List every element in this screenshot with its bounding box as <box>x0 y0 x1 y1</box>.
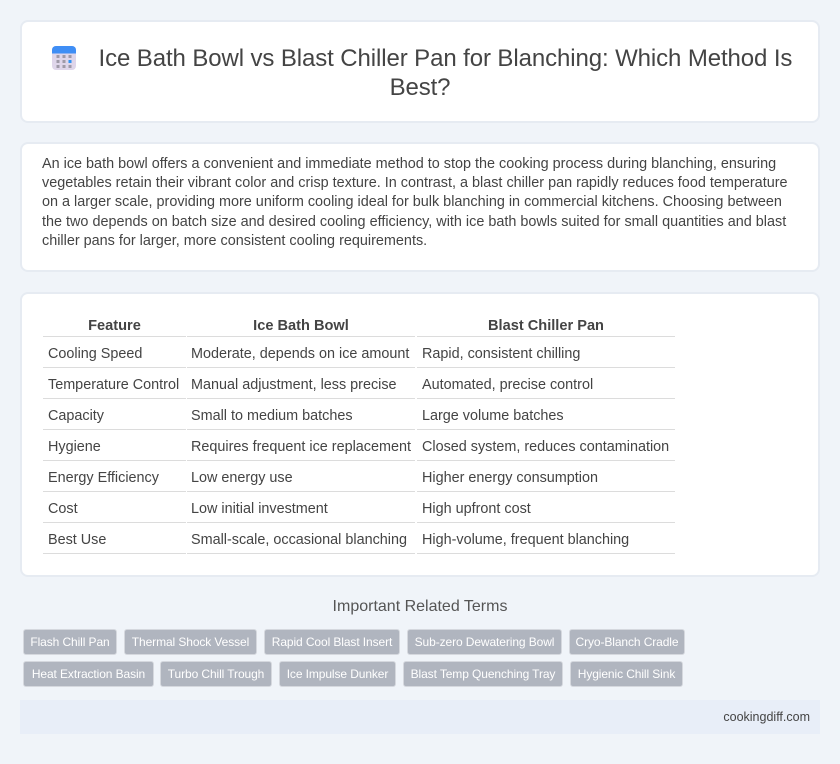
table header row: Feature <box>88 318 141 334</box>
icon: calendar grid <box>52 46 76 70</box>
tag <box>124 629 257 655</box>
row: temperature control <box>43 377 675 399</box>
row: cost: High upfront cost <box>422 501 531 517</box>
tag <box>569 629 685 655</box>
row: temperature control: Automated, precise control <box>422 377 593 393</box>
row: cooling speed <box>43 346 675 368</box>
tag <box>570 661 683 687</box>
footer source label: cookingdiff.com <box>723 710 810 724</box>
row: best use: Best Use <box>48 532 106 548</box>
tag: Sub-zero Dewatering Bowl <box>415 635 554 649</box>
row: hygiene: Closed system, reduces contamination <box>422 439 669 455</box>
row: energy efficiency: Low energy use <box>191 470 293 486</box>
intro paragraph: chiller pans for larger, more consistent cooling requirements. <box>42 233 427 249</box>
row: hygiene: Requires frequent ice replacement <box>191 439 411 455</box>
tag: Blast Temp Quenching Tray <box>411 667 555 681</box>
tag: Cryo-Blanch Cradle <box>576 635 678 649</box>
row: capacity <box>43 408 675 430</box>
title: Ice Bath Bowl vs Blast Chiller Pan for Blanching: Which Method Is <box>98 45 792 72</box>
table header row <box>43 318 675 337</box>
row: cost: Cost <box>48 501 78 517</box>
intro paragraph <box>42 156 788 249</box>
panel: intro text card <box>20 142 820 272</box>
row: hygiene: Hygiene <box>48 439 101 455</box>
tag <box>264 629 400 655</box>
row: capacity: Large volume batches <box>422 408 564 424</box>
row: cooling speed: Rapid, consistent chilling <box>422 346 580 362</box>
tag <box>23 661 154 687</box>
intro paragraph: on a larger scale, providing more uniform cooling ideal for bulk blanching in commercial kitchens. Choosing between <box>42 194 782 210</box>
title: Best? <box>390 74 450 101</box>
tag: Thermal Shock Vessel <box>132 635 249 649</box>
row: cost: Low initial investment <box>191 501 328 517</box>
tag <box>160 661 272 687</box>
tag: Rapid Cool Blast Insert <box>272 635 392 649</box>
title <box>98 45 792 101</box>
row: best use: High-volume, frequent blanching <box>422 532 629 548</box>
row: energy efficiency: Higher energy consumption <box>422 470 598 486</box>
row: best use: Small-scale, occasional blanching <box>191 532 407 548</box>
row: capacity: Capacity <box>48 408 104 424</box>
comparison table <box>43 318 675 554</box>
row: temperature control: Temperature Control <box>48 377 179 393</box>
row: best use <box>43 532 675 554</box>
row: hygiene <box>43 439 675 461</box>
row: capacity: Small to medium batches <box>191 408 353 424</box>
row: cost <box>43 501 675 523</box>
tag: Flash Chill Pan <box>30 635 110 649</box>
tag: Heat Extraction Basin <box>32 667 145 681</box>
tag <box>407 629 562 655</box>
related terms heading: Important Related Terms <box>333 598 507 615</box>
tag: Hygienic Chill Sink <box>578 667 675 681</box>
tag <box>403 661 563 687</box>
row: temperature control: Manual adjustment, less precise <box>191 377 397 393</box>
tag: Ice Impulse Dunker <box>287 667 388 681</box>
row: energy efficiency <box>43 470 675 492</box>
row: energy efficiency: Energy Efficiency <box>48 470 159 486</box>
intro paragraph: An ice bath bowl offers a convenient and immediate method to stop the cooking process during blanching, ensuring <box>42 156 776 172</box>
intro paragraph: vegetables retain their vibrant color and crisp texture. In contrast, a blast chiller pan rapidly reduces food temperature <box>42 175 788 191</box>
tag <box>279 661 396 687</box>
panel: comparison table card <box>20 292 820 577</box>
tag <box>23 629 117 655</box>
panel: title card <box>20 20 820 123</box>
row: cooling speed: Moderate, depends on ice amount <box>191 346 409 362</box>
related terms tags <box>23 629 685 687</box>
row: cooling speed: Cooling Speed <box>48 346 142 362</box>
tag: Turbo Chill Trough <box>168 667 264 681</box>
footer bar <box>20 700 820 734</box>
table header row: Blast Chiller Pan <box>488 318 604 334</box>
table header row: Ice Bath Bowl <box>253 318 349 334</box>
intro paragraph: the two depends on batch size and desired cooling efficiency, with ice bath bowls suited for small quantities and blast <box>42 214 786 230</box>
